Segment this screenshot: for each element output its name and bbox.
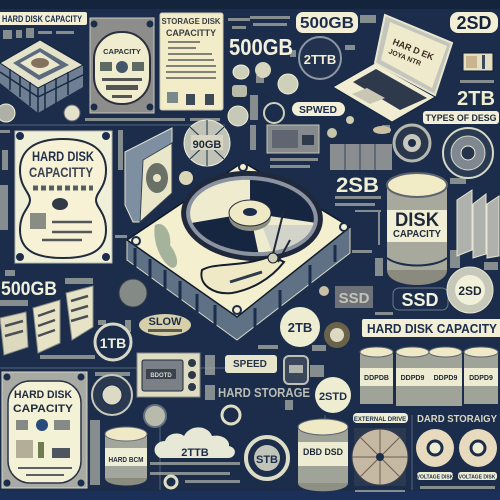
icon: cloud 2TTB [155, 427, 235, 459]
can: hard bcm: HARD BCM [108, 455, 144, 464]
panel: hard disk capacity lower: HARD DISK [14, 389, 72, 401]
can 4: DDPD9 [469, 375, 493, 382]
pill: 2SD: 2SD [456, 13, 492, 33]
title banner: hard disk capacity [0, 12, 87, 25]
panel: gray module [267, 125, 319, 153]
can: hard bcm [105, 427, 147, 486]
icon: round badges column [228, 62, 298, 126]
pill: small label: EXTERNAL DRIVE [354, 417, 406, 423]
panel: hard disk capacity card [15, 131, 112, 263]
pill: spwed [292, 102, 345, 116]
drive corner screws [132, 163, 348, 314]
read arm [201, 210, 290, 293]
badge: 2TB [280, 307, 320, 347]
icon: gear badge [324, 322, 350, 348]
badge: 2STD [315, 377, 351, 413]
badge: 2TTB: 2TTB [304, 52, 336, 67]
icon: gray disc [119, 279, 147, 307]
can: DBD DSD: DBD DSD [303, 447, 343, 457]
icon: right disc [459, 429, 497, 467]
pill: SSD outlined [393, 288, 448, 310]
icon: standing drive [125, 128, 172, 222]
label: 2SB: 2SB [336, 174, 379, 197]
badge: 5TB ring: STB [256, 454, 278, 466]
can: disk capacity: CAPACITY [393, 228, 441, 240]
badge: 2TB: 2TB [288, 320, 312, 335]
chart: central hard disk drive [127, 162, 350, 340]
icon: monitor device: BDOTD [150, 373, 172, 379]
disk platter [181, 170, 323, 261]
panel: hard disk capacity card: CAPACITTY [29, 165, 93, 180]
pill: 500GB: 500GB [300, 15, 354, 32]
pill: speed: SPEED [233, 359, 267, 370]
heading: 500GB large: 500GB [229, 34, 293, 60]
can: DBD DSD [298, 419, 348, 491]
icon: tilted memory cards [0, 286, 93, 355]
icon: isometric drive stack [0, 40, 83, 113]
panel: hard disk capacity lower [2, 372, 87, 488]
spindle hub [229, 200, 271, 231]
icon: device box [463, 53, 493, 71]
label: 500GB left: 500GB [1, 279, 57, 300]
pill: disc caption left: VOLTAGE DISK [417, 474, 454, 480]
pill: slow: SLOW [148, 316, 182, 328]
icon: laptop: HAR D EK [391, 37, 436, 62]
icon: small round badges under stack [0, 104, 80, 122]
pill: disc caption right [458, 472, 497, 480]
icon: laptop [333, 15, 452, 122]
icon: gear dial [394, 125, 430, 161]
badge: 1TB [95, 324, 131, 360]
pill: 2SD [450, 12, 498, 33]
icon: segmented dial [443, 128, 493, 178]
can 1: DDPDB [364, 375, 389, 382]
icon: cloud 2TTB: 2TTB [181, 447, 209, 459]
pill: 500GB [296, 12, 358, 33]
pill: SSD outlined: SSD [401, 290, 439, 310]
icon: monitor device [137, 353, 200, 397]
panel: drive capacity label [90, 18, 154, 113]
icon: ring badges [165, 406, 240, 488]
can 3: DDPD9 [434, 375, 457, 382]
chart: row of four cans [360, 347, 498, 406]
label: SSD gray [319, 286, 373, 308]
icon: small disc [179, 171, 193, 185]
panel: storage disk capacity sheet: CAPACITTY [166, 28, 216, 38]
label: hard storage: HARD STORAGE [218, 385, 310, 400]
stain detail on drive plate [154, 224, 177, 268]
label: 2TB: 2TB [457, 88, 495, 110]
title banner: hard disk capacity: HARD DISK CAPACITY [2, 14, 82, 24]
can: disk capacity: DISK [395, 210, 439, 231]
badge: 5TB ring [246, 437, 288, 479]
pill: disc caption right: VOLTAGE DISK [459, 474, 496, 480]
icon: gauge badge [92, 375, 132, 415]
pill: slow [139, 314, 191, 336]
badge: 2TTB [299, 37, 341, 79]
heading: dard storaigy: DARD STORAIGY [417, 414, 497, 425]
panel: hard disk capacity card: HARD DISK [32, 149, 94, 164]
pill: speed [225, 355, 277, 373]
panel: hard disk capacity lower: CAPACITY [13, 403, 74, 415]
badge: 2SD: 2SD [458, 284, 482, 298]
panel: drive capacity label: CAPACITY [103, 47, 141, 56]
panel: storage disk capacity sheet: STORAGE DISK [162, 16, 221, 26]
can 2: DDPD9 [401, 375, 424, 382]
icon: watch device [284, 356, 308, 384]
chart: 90GB segmented gauge [184, 120, 230, 166]
can: disk capacity [387, 173, 447, 285]
icon: gray boxes with figures [327, 116, 392, 170]
icon: small badge [144, 405, 166, 427]
pill: small label [353, 413, 408, 423]
pill: disc caption left [417, 472, 454, 480]
chart: 90GB segmented gauge: 90GB [193, 139, 221, 151]
badge: 2STD: 2STD [319, 391, 347, 403]
pill: types of desg: TYPES OF DESG [426, 113, 496, 124]
badge: 1TB: 1TB [100, 335, 126, 351]
panel: storage disk capacity sheet [160, 13, 223, 110]
icon: left disc [416, 429, 454, 467]
pill: spwed: SPWED [299, 105, 337, 116]
icon: server slabs [457, 190, 499, 258]
icon: laptop: JOYA NTR [387, 48, 422, 68]
label: SSD gray: SSD [339, 290, 370, 307]
icon: wheel platter [352, 428, 408, 486]
badge: 2SD [447, 267, 493, 313]
